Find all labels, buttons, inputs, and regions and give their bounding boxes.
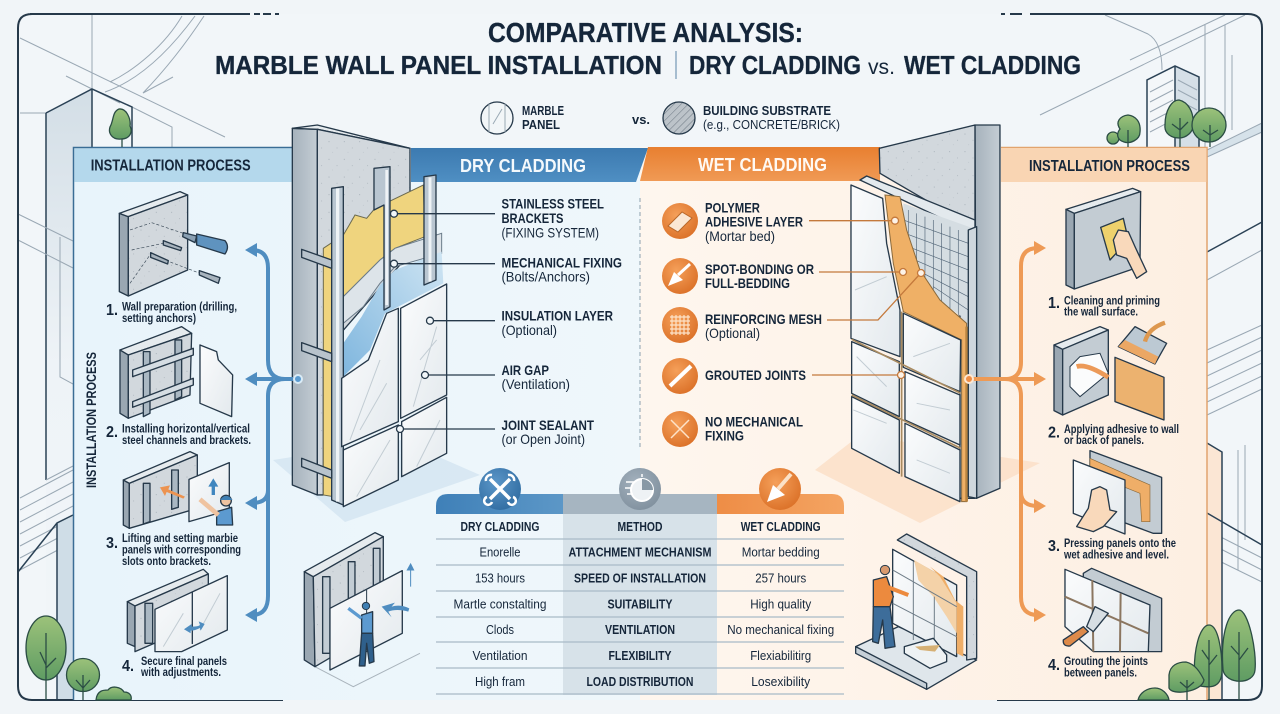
banner: dry cladding <box>411 148 648 182</box>
illustration: hand pressing panel <box>1073 451 1162 534</box>
icon: wrench and spanner <box>479 468 521 510</box>
dry cladding labels: JOINT SEALANT <box>502 417 594 433</box>
right step 1: cleaning and priming <box>1048 188 1160 319</box>
table column: method <box>568 519 712 689</box>
legend: MARBLE <box>522 103 564 118</box>
dry cladding labels: (FIXING SYSTEM) <box>502 225 599 241</box>
wet cladding labels: FIXING <box>705 428 744 444</box>
icon: grouted joints <box>662 358 698 394</box>
illustration: sponge on wall <box>1066 188 1147 289</box>
table column: dry cladding: 153 hours <box>475 571 525 586</box>
left step 4: securing panels <box>122 569 227 679</box>
table column: wet cladding: 257 hours <box>755 571 807 586</box>
panel: right orange background <box>640 147 1207 700</box>
right step 1: cleaning and priming: the wall surface. <box>1064 305 1138 319</box>
dry cladding labels: (Optional) <box>502 322 557 338</box>
wet cladding labels: (Mortar bed) <box>705 228 775 244</box>
table column: dry cladding: Clods <box>486 622 514 637</box>
right step 3: pressing panels: wet adhesive and level. <box>1063 548 1169 562</box>
wet cladding labels: ADHESIVE LAYER <box>705 214 803 230</box>
icon: trowel <box>759 468 801 510</box>
wet cladding labels: SPOT-BONDING OR <box>705 261 814 277</box>
legend: BUILDING SUBSTRATE <box>703 103 831 118</box>
table column: method: SPEED OF INSTALLATION <box>574 571 706 586</box>
table column: method: FLEXIBILITY <box>608 648 672 663</box>
right step 4: grouting: Grouting the joints <box>1064 654 1148 668</box>
left step 2: channels and brackets: steel channels and brackets. <box>122 433 251 447</box>
right step 3: pressing panels <box>1048 451 1176 562</box>
right step 1: cleaning and priming: Cleaning and priming <box>1064 293 1160 307</box>
table column: wet cladding: Mortar bedding <box>742 545 820 560</box>
dry cladding labels <box>502 196 622 447</box>
title: vs. <box>868 56 895 79</box>
left step 1: wall preparation: setting anchors) <box>122 311 196 325</box>
arrows: right process flow <box>965 241 1046 622</box>
dry cladding callout leaders <box>390 210 495 432</box>
panel: left blue background <box>73 147 640 700</box>
wet cladding callout leaders <box>809 217 924 378</box>
banner: wet cladding: WET CLADDING <box>698 155 827 175</box>
legend: PANEL <box>522 117 560 132</box>
banner: wet cladding <box>640 147 880 181</box>
left step 3: lifting panels: 3. <box>106 535 118 552</box>
right step 3: pressing panels: 3. <box>1048 538 1060 555</box>
icon: trowel for spot-bonding <box>662 258 698 294</box>
comparison table <box>436 468 844 695</box>
left step 2: channels and brackets: Installing horizontal/vertical <box>122 422 250 436</box>
table column: wet cladding: No mechanical fixing <box>727 622 834 637</box>
table column: method: METHOD <box>618 519 662 534</box>
heading: left installation process: INSTALLATION PROCESS <box>91 158 251 175</box>
right step 3: pressing panels: Pressing panels onto the <box>1064 536 1176 550</box>
table column: method: VENTILATION <box>605 622 675 637</box>
table column: wet cladding: WET CLADDING <box>741 519 821 534</box>
illustration: worker installing dry panel <box>304 533 420 687</box>
illustration: final panels adjusted <box>127 569 227 652</box>
heading: right installation process: INSTALLATION PROCESS <box>1029 158 1190 175</box>
dry cladding labels: BRACKETS <box>502 210 564 226</box>
title: COMPARATIVE ANALYSIS: <box>488 17 803 48</box>
illustration: drilling anchors <box>119 192 227 296</box>
title: MARBLE WALL PANEL INSTALLATION <box>215 50 662 80</box>
right step 1: cleaning and priming: 1. <box>1048 295 1060 312</box>
floor shadows under the walls <box>273 435 1040 523</box>
table column: dry cladding: Enorelle <box>480 545 520 560</box>
title <box>215 17 1081 80</box>
right step 2: applying adhesive: or back of panels. <box>1064 433 1144 447</box>
title: DRY CLADDING <box>689 50 861 80</box>
dry cladding labels: (or Open Joint) <box>502 431 585 447</box>
table column: wet cladding <box>727 519 834 689</box>
table column: method: ATTACHMENT MECHANISM <box>568 545 712 560</box>
right step 4: grouting <box>1048 568 1162 680</box>
illustration: adhesive, trowel and panel back <box>1054 323 1167 420</box>
left step 4: securing panels: 4. <box>122 658 134 675</box>
table column: dry cladding: Ventilation <box>472 648 528 663</box>
table column: dry cladding <box>454 519 546 689</box>
left step 1: wall preparation <box>106 192 237 325</box>
illustration: worker lifting marble panel <box>123 452 233 528</box>
illustration: steel channels and marble piece <box>120 327 233 418</box>
wet cladding labels: REINFORCING MESH <box>705 311 822 327</box>
centre dashed divider <box>639 198 641 450</box>
wet cladding labels: (Optional) <box>705 325 760 341</box>
right background trees <box>1107 100 1255 700</box>
table column: method: LOAD DISTRIBUTION <box>586 674 694 689</box>
left step 3: lifting panels <box>106 452 241 568</box>
dry cladding labels: AIR GAP <box>502 362 549 378</box>
icon: polymer adhesive layer <box>662 203 698 239</box>
left step 4: securing panels: with adjustments. <box>140 665 221 679</box>
table column: wet cladding: High quality <box>750 597 812 612</box>
legend: (e.g., CONCRETE/BRICK) <box>703 117 840 132</box>
left step 2: channels and brackets: 2. <box>106 424 118 441</box>
dry cladding wall diagram <box>292 125 447 507</box>
table header bars <box>436 494 844 514</box>
table method column tint <box>563 514 717 695</box>
wet cladding labels <box>705 199 822 444</box>
dry cladding labels: (Ventilation) <box>502 376 570 392</box>
table column: dry cladding: DRY CLADDING <box>460 519 540 534</box>
table column: wet cladding: Flexiabilitirg <box>750 648 811 663</box>
table column: dry cladding: Martle constalting <box>454 597 546 612</box>
right step 2: applying adhesive <box>1048 323 1179 447</box>
banner: dry cladding: DRY CLADDING <box>460 156 586 176</box>
table column: wet cladding: Losexibility <box>751 674 811 689</box>
icon: reinforcing mesh <box>662 307 698 343</box>
table column: method: SUITABILITY <box>608 597 673 612</box>
dry cladding labels: MECHANICAL FIXING <box>502 255 622 271</box>
wet cladding labels: NO MECHANICAL <box>705 414 803 430</box>
illustration: worker applying wet adhesive <box>856 534 977 689</box>
illustration: scraper grouting joints <box>1063 568 1162 652</box>
dry cladding labels: (Bolts/Anchors) <box>502 269 590 285</box>
left step 1: wall preparation: 1. <box>106 302 118 319</box>
wet cladding labels: FULL-BEDDING <box>705 275 790 291</box>
icon: no mechanical fixing <box>662 411 698 447</box>
legend <box>481 102 840 134</box>
right step 2: applying adhesive: Applying adhesive to wall <box>1064 422 1179 436</box>
legend: vs. <box>632 112 650 127</box>
dry cladding labels: STAINLESS STEEL <box>502 196 604 212</box>
icon: stopwatch <box>619 468 661 510</box>
right step 4: grouting: between panels. <box>1064 666 1137 680</box>
left background trees <box>26 109 131 700</box>
title: WET CLADDING <box>904 50 1081 80</box>
left step 3: lifting panels: panels with corresponding <box>122 542 241 556</box>
right step 2: applying adhesive: 2. <box>1048 425 1060 442</box>
wet cladding wall diagram <box>851 125 1000 502</box>
left step 4: securing panels: Secure final panels <box>141 654 227 668</box>
table row rules <box>436 539 844 694</box>
right step 4: grouting: 4. <box>1048 657 1060 674</box>
heading: vertical installation process: INSTALLATION PROCESS <box>83 352 99 488</box>
wet cladding labels: POLYMER <box>705 199 760 215</box>
wet cladding labels: GROUTED JOINTS <box>705 367 806 383</box>
arrows: left process flow <box>245 243 302 622</box>
left step 3: lifting panels: Lifting and setting marbie <box>122 531 238 545</box>
table column: dry cladding: High fram <box>475 674 525 689</box>
dry cladding labels: INSULATION LAYER <box>502 308 613 324</box>
left step 2: channels and brackets <box>106 327 251 447</box>
left step 3: lifting panels: slots onto brackets. <box>122 554 211 568</box>
left step 1: wall preparation: Wall preparation (drilling, <box>122 300 237 314</box>
